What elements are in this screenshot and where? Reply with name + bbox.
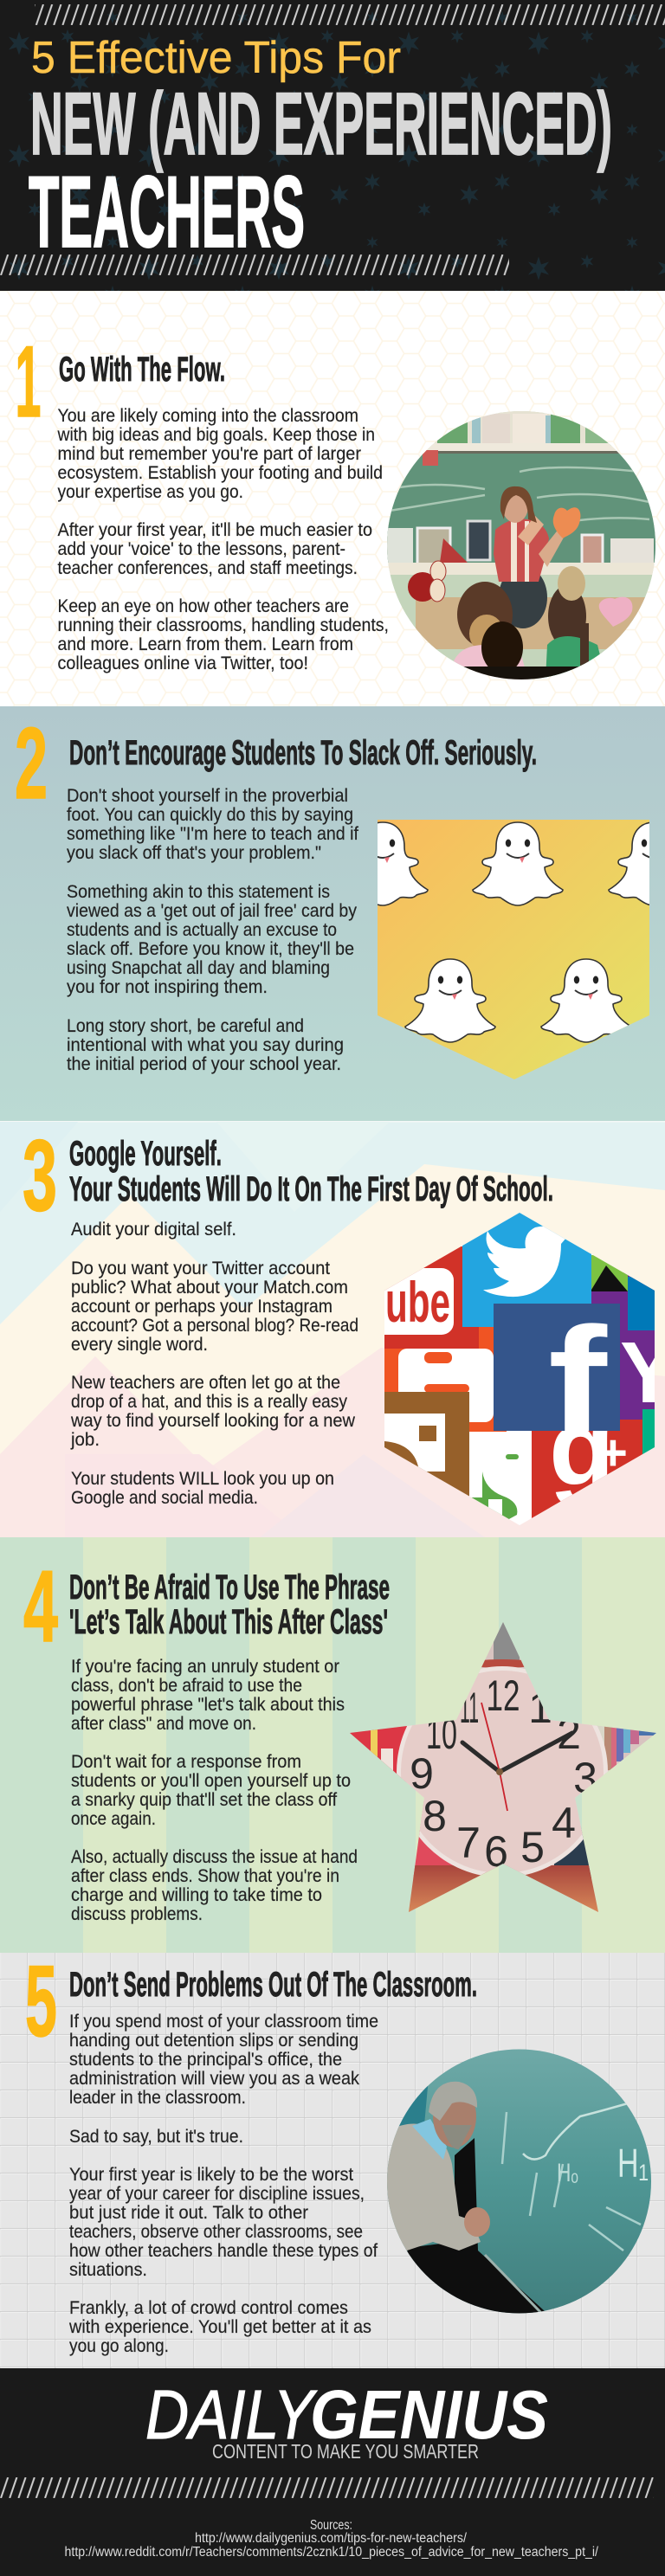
text block: tip 3 body: way to find yourself looking for a new [70, 1411, 356, 1431]
text block: tip 4 body: a snarky quip that'll set the class off [71, 1790, 337, 1810]
icon: evernote green [469, 1432, 519, 1519]
tagline: CONTENT TO MAKE YOU SMARTER [212, 2440, 479, 2463]
text block: tip 5 body: Your first year is likely to be the worst [69, 2165, 353, 2185]
image: snapchat ghosts in pennant [378, 820, 649, 1079]
text block: tip 2 body: slack off. Before you know it, they'll be [67, 939, 354, 959]
text block: tip 4 body: Don't wait for a response from [71, 1752, 301, 1772]
text block: tip 1 body: with big ideas and big goals. Keep those in [57, 425, 375, 445]
text block: tip 5 body: situations. [69, 2260, 147, 2280]
panel: tip 1 [0, 291, 665, 706]
heading: tip 4: Don’t Be Afraid To Use The Phrase [69, 1568, 390, 1607]
text block: tip 3 body: drop of a hat, and this is a really easy [71, 1392, 347, 1412]
clock numerals: 8 [423, 1792, 447, 1840]
text block: tip 1 body: teacher conferences, and staff meetings. [57, 558, 358, 578]
clock numerals: 11 [460, 1684, 479, 1732]
icon: google plus [532, 1420, 642, 1518]
text block: tip 1 body [57, 406, 389, 673]
panel: tip 2 [0, 706, 665, 1122]
heading: tip 3: Google Yourself. [69, 1135, 222, 1173]
sources: http://www.dailygenius.com/tips-for-new-teachers/ [195, 2531, 468, 2546]
logo: Daily Genius [145, 2376, 548, 2453]
text block: tip 4 body: charge and willing to take time to [71, 1885, 322, 1905]
text block: tip 4 body: class, don't be afraid to use the [71, 1676, 302, 1696]
clock numerals: 5 [520, 1823, 545, 1871]
image: social media icons in hexagon [384, 1213, 655, 1525]
text block: tip 5 body: you go along. [69, 2336, 169, 2356]
text block: tip 3 body: job. [70, 1430, 100, 1450]
header panel [0, 0, 665, 291]
text block: tip 5 body: leader in the classroom. [69, 2088, 246, 2108]
text block: tip 1 body: running their classrooms, handling students, [57, 615, 389, 635]
text block: tip 4 body: discuss problems. [71, 1904, 203, 1924]
header panel: TEACHERS [29, 155, 305, 268]
text block: tip 1 body: and more. Learn from them. Learn from [57, 634, 353, 654]
text block: tip 5 body: teachers, observe other classrooms, see [69, 2222, 363, 2242]
icon: google plus: g [549, 1388, 615, 1508]
icon: right-side logos [591, 1255, 655, 1454]
text block: tip 3 body: account or perhaps your Instagram [71, 1297, 332, 1317]
text block: tip 2 body: the initial period of your school year. [67, 1054, 341, 1074]
sources [64, 2518, 599, 2560]
text block: tip 5 body: students to the principal's office, the [69, 2050, 342, 2070]
text block: tip 1 body: add your 'voice' to the lessons, parent- [57, 539, 345, 559]
heading: tip 4 [69, 1568, 390, 1641]
panel: tip 1: 1 [16, 325, 42, 438]
clock numerals: 9 [410, 1749, 434, 1798]
image: teacher leaning on chalkboard in circle: Hₒ [557, 2159, 578, 2187]
title: 5 Effective Tips For: 5 Effective Tips For [31, 33, 401, 83]
text block: tip 3 body: New teachers are often let go at the [71, 1373, 340, 1393]
sources: http://www.reddit.com/r/Teachers/comments/2cznk1/10_pieces_of_advice_for_new_teachers_pt_i/ [64, 2545, 599, 2560]
icon: google plus: + [598, 1425, 628, 1481]
text block: tip 2 body: something like "I'm here to teach and if [67, 824, 358, 844]
logo: Daily Genius: DAILY [145, 2376, 318, 2453]
text block: tip 2 body: foot. You can quickly do this by saying [67, 805, 353, 825]
number 4: 4 [23, 1549, 58, 1663]
text block: tip 5 body: Frankly, a lot of crowd control comes [69, 2298, 348, 2318]
text block: tip 1 body: mind but remember you're part of larger [57, 444, 361, 464]
text block: tip 2 body [67, 786, 358, 1074]
clock numerals: 3 [573, 1754, 597, 1802]
text block: tip 2 body: intentional with what you say during [67, 1035, 344, 1055]
text block: tip 1 body: your expertise as you go. [57, 482, 243, 502]
icon: facebook: f [548, 1297, 608, 1463]
sources: Sources: [310, 2518, 352, 2533]
number 2: 2 [15, 706, 48, 820]
text block: tip 5 body: handing out detention slips or sending [69, 2031, 358, 2051]
text block: tip 2 body: Don't shoot yourself in the proverbial [67, 786, 348, 806]
text block: tip 5 body: year of your career for discipline issues, [69, 2184, 365, 2204]
text block: tip 5 body [68, 2012, 378, 2356]
text block: tip 4 body: powerful phrase "let's talk about this [71, 1695, 345, 1715]
heading: tip 4: 'Let’s Talk About This After Class' [69, 1603, 388, 1641]
clock numerals: 1 [528, 1684, 552, 1732]
icon: twitter [462, 1213, 591, 1327]
icon: youtube [384, 1246, 479, 1349]
text block: tip 3 body: every single word. [71, 1335, 208, 1355]
text block: tip 5 body: Sad to say, but it's true. [69, 2127, 243, 2147]
text block: tip 1 body: ecosystem. Establish your footing and build [57, 463, 383, 483]
clock numerals: 7 [456, 1819, 481, 1867]
text block: tip 4 body: after class ends. Show that you're in [71, 1866, 339, 1886]
clock numerals [412, 1680, 596, 1866]
text block: tip 1 body: After your first year, it'll be much easier to [57, 520, 372, 540]
clock numerals: 6 [484, 1827, 508, 1876]
text block: tip 2 body: Long story short, be careful and [67, 1016, 304, 1036]
clock numerals: 4 [552, 1799, 576, 1847]
number 3: 3 [23, 1118, 57, 1232]
text block: tip 3 body: account? Got a personal blog? Re-read [71, 1316, 358, 1336]
number 5: 5 [25, 1944, 57, 2058]
text block: tip 3 body: Do you want your Twitter account [71, 1259, 330, 1278]
clock numerals: 2 [557, 1710, 581, 1758]
panel: footer [0, 2368, 665, 2576]
icon: blogger [384, 1327, 507, 1441]
panel: tip 5 [0, 1944, 665, 2368]
heading: tip 3 [69, 1135, 553, 1208]
panel: tip 4 [0, 1537, 665, 1953]
text block: tip 2 body: you slack off that's your problem." [67, 843, 321, 863]
image: classroom teacher in circle [387, 411, 655, 679]
image: clock in star [346, 1619, 660, 1917]
text block: tip 3 body: Google and social media. [71, 1488, 258, 1508]
text block: tip 4 body: students or you'll open yourself up to [71, 1771, 351, 1791]
image: teacher leaning on chalkboard in circle [385, 2047, 654, 2320]
text block: tip 5 body: with experience. You'll get better at it as [68, 2317, 371, 2337]
panel: tip 3 [0, 1118, 665, 1537]
text block: tip 1 body: colleagues online via Twitter, too! [57, 654, 308, 673]
logo: Daily Genius: GENIUS [310, 2376, 548, 2453]
text block: tip 2 body: using Snapchat all day and blaming [67, 958, 330, 978]
text block: tip 4 body: If you're facing an unruly student or [71, 1657, 339, 1677]
icon: foursquare-style brown tile [384, 1392, 469, 1497]
icon: youtube: ube [385, 1270, 450, 1334]
text block: tip 5 body: but just ride it out. Talk to other [69, 2203, 308, 2223]
text block: tip 3 body: Audit your digital self. [71, 1220, 236, 1240]
text block: tip 2 body: students and is actually an excuse to [67, 920, 337, 940]
heading: Go With The Flow: Go With The Flow. [59, 351, 225, 389]
text block: tip 5 body: how other teachers handle these types of [69, 2241, 378, 2261]
icon: facebook [494, 1304, 620, 1431]
text block: tip 3 body: Your students WILL look you up on [71, 1469, 334, 1489]
text block: tip 1 body: Keep an eye on how other teachers are [57, 596, 349, 616]
text block: tip 4 body: after class" and move on. [71, 1714, 256, 1734]
clock numerals: 12 [487, 1671, 520, 1720]
clock numerals: 10 [426, 1710, 457, 1758]
text block: tip 2 body: viewed as a 'get out of jail free' card by [67, 901, 357, 921]
text block: tip 5 body: administration will view you as a weak [69, 2069, 359, 2089]
text block: tip 4 body: Also, actually discuss the issue at hand [71, 1847, 358, 1867]
text block: tip 4 body: once again. [71, 1809, 156, 1829]
text block: tip 3 body [70, 1220, 358, 1508]
text block: tip 3 body: public? What about your Match.com [71, 1278, 348, 1298]
text block: tip 2 body: Something akin to this statement is [67, 882, 330, 902]
text block: tip 4 body [71, 1657, 358, 1924]
text block: tip 1 body: You are likely coming into the classroom [57, 406, 358, 426]
text block: tip 2 body: you for not inspiring them. [67, 977, 268, 997]
text block: tip 5 body: If you spend most of your classroom time [69, 2012, 378, 2032]
image: teacher leaning on chalkboard in circle: H₁ [617, 2141, 649, 2186]
